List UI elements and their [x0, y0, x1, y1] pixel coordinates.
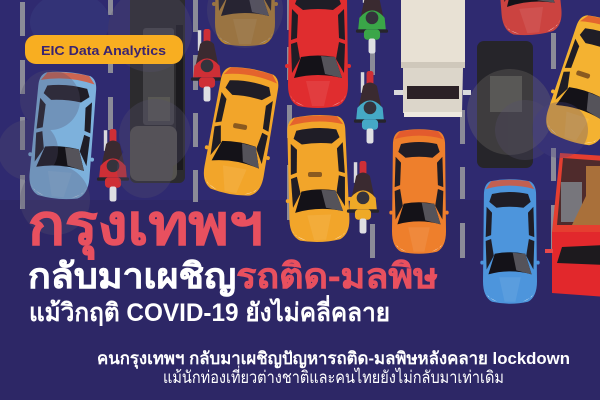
- motorbike: blue rider: [354, 71, 386, 144]
- car: yellow taxi left: [198, 63, 285, 200]
- summary line 1: คนกรุงเทพฯ กลับมาเผชิญปัญหารถติด-มลพิษหลังคลาย lockdown: [97, 349, 570, 369]
- headline: Bangkok: กรุงเทพฯ: [28, 193, 263, 260]
- motorbike: yellow rider: [347, 161, 379, 234]
- summary line 2: แม้นักท่องเที่ยวต่างชาติและคนไทยยังไม่กลับมาเท่าเดิม: [163, 365, 504, 387]
- badge: EIC Data Analytics: EIC Data Analytics: [41, 44, 166, 58]
- car: brown taxi, top: [212, 0, 278, 46]
- truck: red with cargo: [545, 153, 600, 297]
- exhaust smoke: [0, 0, 588, 235]
- motorbike: red rider 2: [97, 129, 129, 202]
- car: light blue: [25, 69, 101, 202]
- car: red top: [285, 0, 351, 108]
- headline: returns to traffic and pollution: กลับมาเผชิญ รถติด-มลพิษ: [28, 257, 438, 297]
- car: blue: [480, 179, 540, 304]
- car: yellow taxi right: [538, 10, 600, 151]
- taxi sign centre: [308, 172, 322, 177]
- motorbike: green rider: [356, 0, 388, 53]
- motorbike: red rider 1: [191, 29, 223, 101]
- car: yellow taxi centre: [283, 114, 353, 243]
- car: orange: [389, 129, 449, 254]
- vehicles: [25, 0, 600, 304]
- lane markings: [20, 0, 556, 258]
- taxi sign left: [233, 123, 247, 130]
- car: red top right: [490, 0, 566, 38]
- car: black: [467, 41, 553, 168]
- badge: EIC Data Analytics: [25, 35, 183, 64]
- truck: white: [394, 0, 471, 117]
- bus: black: [130, 0, 185, 183]
- taxi sign right: [576, 70, 591, 79]
- sub-headline: COVID-19: แม้วิกฤติ COVID-19 ยังไม่คลี่คลาย: [29, 295, 390, 327]
